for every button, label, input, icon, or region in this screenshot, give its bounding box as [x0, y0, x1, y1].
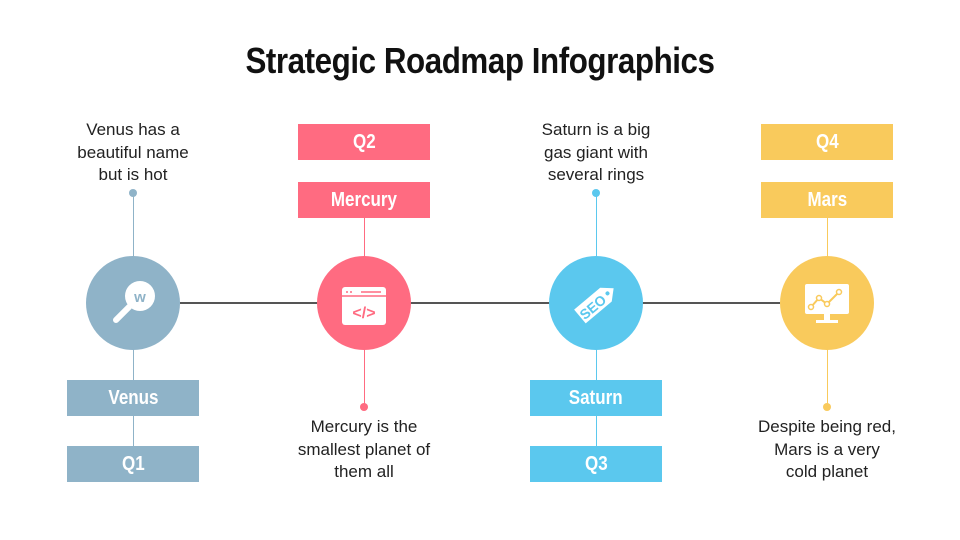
- box: Saturn: [530, 380, 662, 416]
- text: mercury: Mercury is the: [311, 417, 417, 436]
- text: mercury: [298, 417, 430, 481]
- column 3: Saturn: [530, 120, 662, 482]
- text: mars: Despite being red,: [758, 417, 896, 436]
- circle icon: magnifier: w: [133, 289, 146, 306]
- box: Q4: Q4: [816, 131, 838, 153]
- circle icon: SEO tag: SEO: [576, 291, 609, 323]
- text: mars: cold planet: [786, 462, 868, 481]
- connector line: [180, 302, 780, 304]
- box: Q2: [298, 124, 430, 160]
- box: Venus: Venus: [108, 387, 158, 409]
- circle icon: SEO tag: [549, 256, 643, 350]
- dot: [360, 403, 368, 411]
- box: Q2: Q2: [353, 131, 375, 153]
- text: saturn: Saturn is a big: [542, 120, 650, 139]
- dot: [592, 189, 600, 197]
- box: Venus: [67, 380, 199, 416]
- box: Mercury: [298, 182, 430, 218]
- text: saturn: gas giant with: [544, 142, 648, 162]
- text: saturn: [542, 120, 650, 184]
- text: venus: but is hot: [98, 165, 168, 184]
- text: venus: [77, 120, 189, 184]
- text: mars: Mars is a very: [774, 440, 880, 458]
- text: mars: [758, 417, 896, 481]
- title: Strategic Roadmap Infographics: [245, 40, 715, 81]
- box: Saturn: Saturn: [569, 387, 623, 409]
- column 1: Venus: [67, 120, 199, 482]
- box: Q4: [761, 124, 893, 160]
- circle icon: monitor chart: [780, 256, 874, 350]
- column 4: Mars: [758, 124, 896, 481]
- dot: [823, 403, 831, 411]
- box: Q1: Q1: [122, 453, 144, 475]
- text: venus: Venus has a: [86, 120, 180, 139]
- box: Q3: [530, 446, 662, 482]
- text: saturn: several rings: [548, 165, 644, 184]
- box: Mercury: Mercury: [331, 189, 397, 211]
- circle icon: code window: </>: [352, 305, 376, 322]
- text: venus: beautiful name: [77, 142, 189, 162]
- circle icon: code window: [317, 256, 411, 350]
- box: Mars: [761, 182, 893, 218]
- text: mercury: smallest planet of: [298, 440, 430, 458]
- dot: [129, 189, 137, 197]
- box: Q1: [67, 446, 199, 482]
- circle icon: magnifier: [86, 256, 180, 350]
- box: Q3: Q3: [585, 453, 607, 475]
- text: mercury: them all: [334, 462, 394, 481]
- box: Mars: Mars: [807, 189, 847, 211]
- column 2: Mercury: [298, 124, 430, 481]
